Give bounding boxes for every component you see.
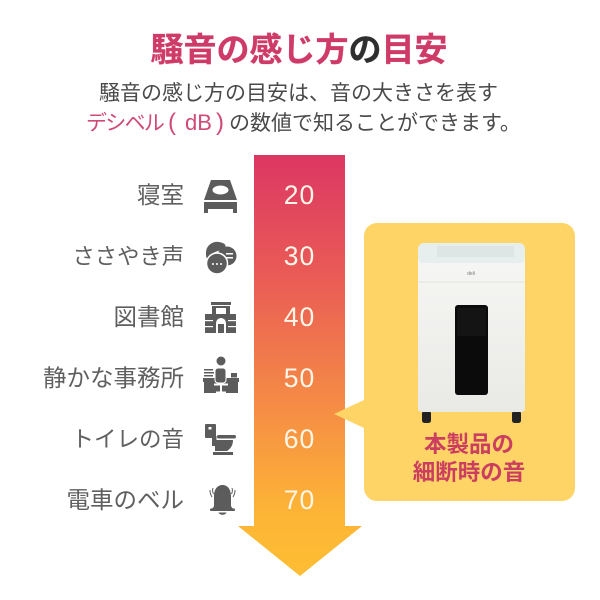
decibel values: 40	[284, 302, 315, 332]
decibel values: 60	[284, 424, 315, 454]
icon: toilet	[205, 424, 236, 455]
decibel values: 70	[284, 485, 315, 515]
sound source labels: ささやき声	[72, 244, 184, 269]
product image: shredder	[418, 243, 525, 423]
sound source labels: 図書館	[114, 304, 184, 330]
sound source labels: 寝室	[137, 182, 184, 208]
subtitle text block: の数値で知ることができます。	[229, 112, 521, 135]
callout text	[413, 432, 525, 485]
gradient arrow scale	[238, 155, 362, 576]
icon: office desk	[203, 356, 239, 393]
sound source labels: 電車のベル	[66, 487, 184, 513]
decibel values: 20	[284, 180, 315, 210]
callout text: 本製品の	[424, 432, 514, 457]
callout text: 細断時の音	[413, 460, 525, 485]
subtitle text block: 騒音の感じ方の目安は、音の大きさを表す	[99, 82, 498, 105]
subtitle text block: dB	[185, 110, 212, 135]
decibel values: 30	[284, 241, 315, 271]
sound source labels: トイレの音	[71, 427, 184, 452]
subtitle text block: (	[168, 109, 176, 136]
decibel values	[284, 180, 315, 515]
icon: speech bubbles	[206, 242, 236, 274]
decibel values: 50	[284, 363, 315, 393]
sound source labels	[43, 182, 184, 513]
icon: ringing bell	[210, 485, 235, 515]
subtitle text block	[86, 82, 521, 136]
subtitle text block: )	[216, 109, 224, 136]
icon: bed	[204, 180, 237, 213]
icon: library building	[205, 302, 236, 333]
title: 騒音の感じ方の目安	[150, 31, 448, 68]
panel: product callout	[334, 223, 575, 501]
sound source labels: 静かな事務所	[43, 365, 184, 391]
product image: shredder: deli	[467, 271, 475, 277]
subtitle text block: デシベル	[86, 112, 164, 135]
